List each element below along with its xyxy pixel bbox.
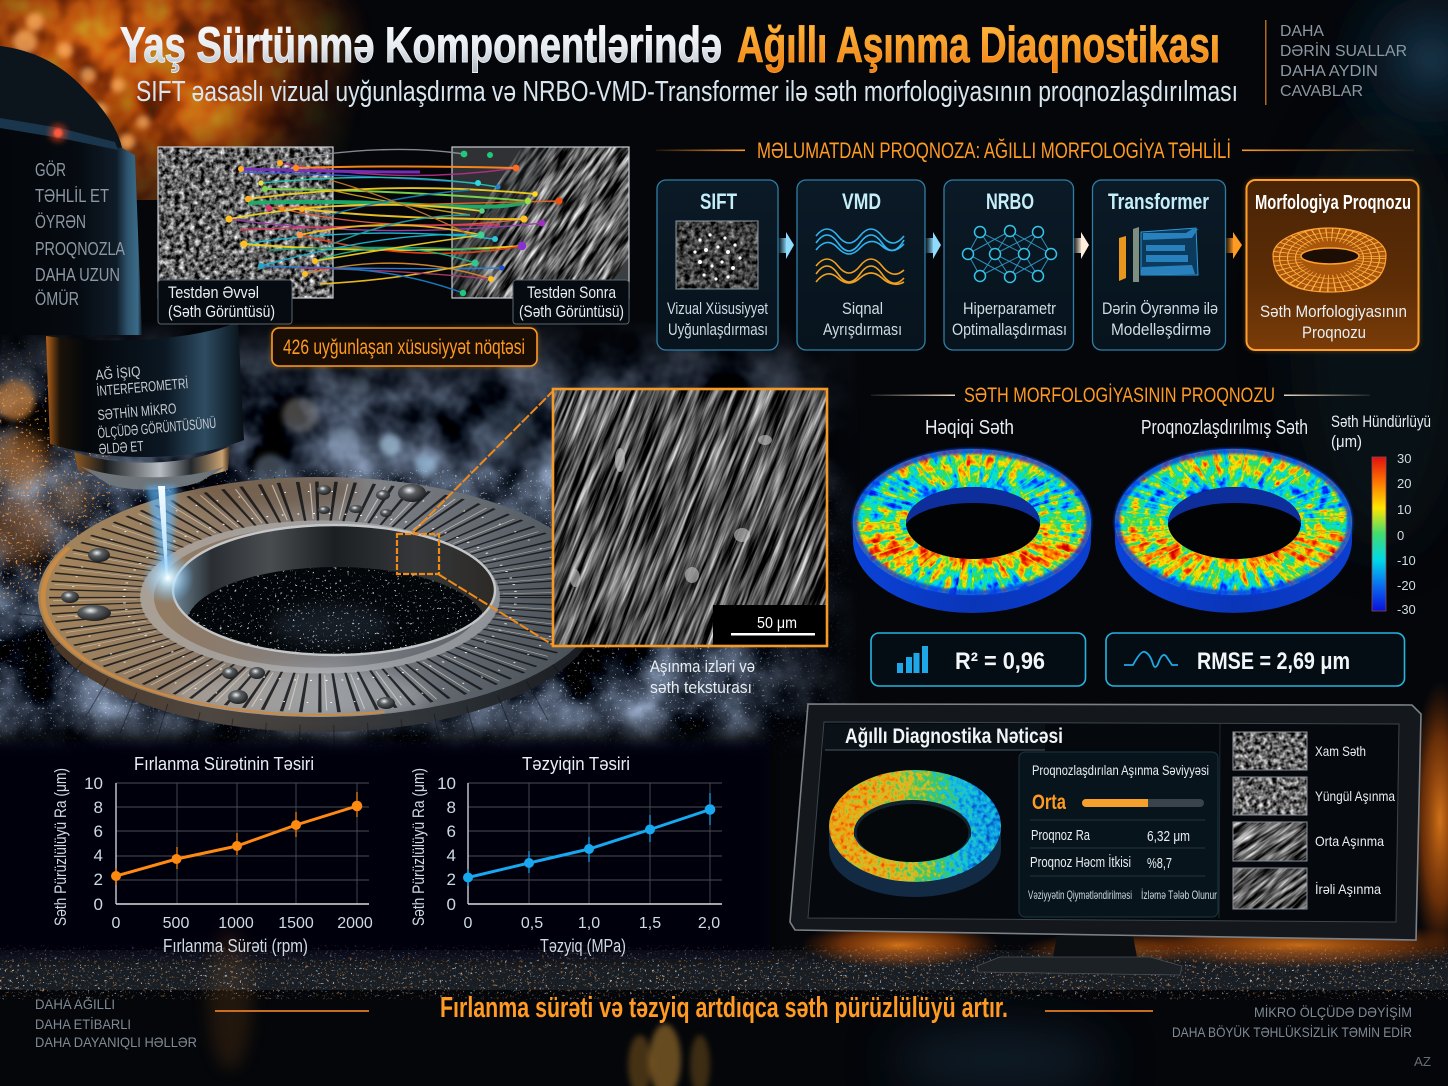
icon: blue signal waves	[816, 229, 904, 254]
panel: pressure chart: 10	[437, 774, 456, 793]
monitor screen	[808, 722, 1399, 922]
image: before test surface	[158, 147, 333, 298]
panel: pressure chart: Təzyiq (MPa)	[540, 936, 626, 956]
panel: prediction result: Vəziyyətin Qiymətləndirilməsi	[1028, 888, 1132, 902]
icon: neural network	[962, 226, 1056, 282]
legend: surface height colour bar: -10	[1397, 553, 1416, 568]
title: Ağıllı Aşınma Diaqnostikası	[737, 17, 1220, 73]
bottom surface strip	[0, 680, 1448, 1086]
label: after test: Testdən Sonra	[527, 283, 616, 302]
legend: surface height colour bar: -30	[1397, 602, 1416, 617]
panel: pressure chart: 6	[447, 822, 456, 841]
scale bar	[731, 615, 815, 636]
text: lens label: ÖLÇÜDƏ GÖRÜNTÜSÜNÜ	[97, 414, 217, 442]
header side note: DƏRİN SUALLAR	[1280, 41, 1407, 60]
wear stage: raw surface	[1233, 732, 1366, 770]
panel: NRBO step: Optimallaşdırması	[952, 321, 1067, 339]
legend: surface height colour bar: 20	[1397, 476, 1411, 491]
legend: surface height colour bar: (μm)	[1331, 433, 1362, 451]
text: left slogan: TƏHLİL ET	[35, 186, 109, 206]
wear stage: advanced wear	[1232, 868, 1382, 910]
panel: rotation speed chart: 0	[112, 915, 121, 932]
text: left slogan: GÖR	[35, 160, 66, 180]
chart grid	[116, 783, 369, 904]
panel: morphology prediction step	[1246, 180, 1418, 350]
blue data series	[464, 793, 715, 886]
text: bottom left slogan	[35, 996, 197, 1050]
panel: Transformer step: Transformer	[1108, 189, 1209, 214]
panel: rotation speed chart: 8	[94, 798, 103, 817]
feature points	[225, 151, 563, 296]
metric: RMSE: RMSE = 2,69 μm	[1197, 648, 1350, 675]
text: inset caption	[650, 657, 755, 697]
heading: result	[822, 724, 1220, 918]
panel: pressure chart: 4	[447, 846, 456, 865]
text: lens label: ƏLDƏ ET	[98, 439, 144, 458]
panel: rotation speed chart: 500	[163, 915, 189, 932]
text: bottom right slogan: DAHA BÖYÜK TƏHLÜKSİZLİK TƏMİN EDİR	[1172, 1023, 1412, 1040]
panel: rotation speed chart: 1500	[278, 915, 314, 932]
text: inset caption: Aşınma izləri və	[650, 657, 755, 676]
text: left slogan: DAHA UZUN	[35, 265, 120, 285]
panel: prediction result: Orta	[1032, 791, 1066, 814]
panel: pressure chart: 1,0	[578, 915, 600, 932]
header side note: CAVABLAR	[1280, 83, 1363, 100]
panel: NRBO step: Hiperparametr	[963, 300, 1056, 318]
text: lens label	[95, 362, 217, 458]
matching lines	[229, 149, 559, 293]
light beam	[142, 486, 194, 604]
panel: pressure chart: 8	[447, 798, 456, 817]
panel: pressure chart: 0	[464, 915, 473, 932]
icon: wave	[1124, 652, 1178, 667]
panel: Transformer step	[1092, 180, 1226, 350]
connector lines to inset	[412, 391, 553, 645]
panel: pressure chart	[409, 754, 722, 956]
wear stage: light wear	[1233, 777, 1395, 815]
panel: rotation speed chart: 0	[94, 895, 103, 914]
panel: metal friction disc	[38, 470, 602, 747]
label: before test	[158, 280, 292, 324]
panel: prediction result	[1019, 752, 1218, 917]
text: left slogan: ÖYRƏN	[35, 212, 86, 232]
ring side wall	[38, 497, 602, 747]
wear stage: advanced wear: İrəli Aşınma	[1315, 880, 1381, 897]
orange data series	[112, 792, 362, 885]
indicator light	[49, 124, 67, 142]
wear stage: light wear: Yüngül Aşınma	[1315, 788, 1395, 804]
heading: result: Ağıllı Diagnostika Nəticəsi	[845, 725, 1063, 748]
metric: R squared	[871, 633, 1086, 686]
icon: transformer blocks	[1119, 227, 1198, 282]
heading: morphology prediction: SƏTH MORFOLOGİYASININ PROQNOZU	[964, 384, 1275, 407]
wear stage: medium wear	[1232, 822, 1384, 862]
header side note	[1265, 20, 1407, 105]
panel: SEM inset	[552, 388, 828, 648]
text: bottom left slogan: DAHA DAYANIQLI HƏLLƏR	[35, 1034, 197, 1050]
panel: SIFT step: Uyğunlaşdırması	[668, 321, 768, 339]
arrow: VMD to NRBO	[925, 232, 941, 259]
ring top face	[38, 470, 602, 721]
language tag: AZ	[1414, 1054, 1431, 1069]
panel: NRBO step	[944, 180, 1074, 350]
text: bottom left slogan: DAHA ETİBARLI	[35, 1015, 131, 1032]
panel: rotation speed chart: 6	[94, 822, 103, 841]
icon: wireframe torus	[1272, 223, 1388, 293]
panel: morphology prediction step: Proqnozu	[1302, 323, 1366, 342]
callout: matched points	[272, 328, 537, 366]
text: bottom left slogan: DAHA AĞILLI	[35, 996, 115, 1012]
panel: rotation speed chart: 2000	[337, 915, 373, 932]
wear level bar	[1082, 799, 1204, 807]
ring inner hole	[172, 524, 496, 656]
scale bar: 50 μm	[757, 615, 797, 632]
panel: VMD step	[797, 180, 925, 350]
label: before test: Testdən Əvvəl	[168, 283, 259, 302]
panel: diagnostics monitor	[790, 704, 1421, 975]
panel: pressure chart: 1,5	[639, 915, 661, 932]
panel: prediction result: 6,32 μm	[1147, 829, 1190, 845]
panel: Transformer step: Modelləşdirmə	[1111, 321, 1211, 339]
legend: surface height colour bar: 10	[1397, 502, 1411, 517]
panel: SIFT feature matching	[157, 146, 630, 370]
lens lower cylinder	[46, 322, 244, 457]
panel: SIFT step: Vizual Xüsusiyyət	[667, 300, 768, 318]
background scene	[0, 0, 1448, 754]
panel: prediction result: Proqnozlaşdırılan Aşınma Səviyyəsi	[1032, 762, 1209, 778]
arrow: Transformer to prediction	[1225, 232, 1242, 259]
panel: prediction result: İzləmə Tələb Olunur	[1141, 888, 1217, 902]
panel: rotation speed chart: 2	[94, 870, 103, 889]
text: lens label: İNTERFEROMETRİ	[96, 374, 189, 400]
panel: rotation speed chart: 10	[84, 774, 103, 793]
header side note: DAHA	[1280, 23, 1324, 40]
legend: surface height colour bar: 30	[1397, 451, 1411, 466]
label: true surface: Həqiqi Səth	[925, 417, 1014, 439]
panel: morphology prediction step: Səth Morfologiyasının	[1260, 302, 1407, 321]
icon: keypoint image	[676, 221, 758, 289]
panel: NRBO step: NRBO	[986, 189, 1034, 214]
icon: orange signal waves	[816, 259, 904, 284]
panel: VMD step: Ayrışdırması	[823, 321, 902, 339]
panel: Transformer step: Dərin Öyrənmə ilə	[1102, 300, 1218, 318]
icon: bars	[897, 646, 928, 673]
label: after test	[513, 280, 629, 324]
panel: pressure chart: 0	[447, 895, 456, 914]
panel: prediction result: Proqnoz Həcm İtkisi	[1030, 853, 1131, 871]
panel: microscope lens	[0, 46, 244, 490]
panel: pressure chart: Səth Pürüzlülüyü Ra (μm)	[409, 768, 428, 926]
monitor stand	[977, 936, 1182, 975]
chart: true surface 3D ring	[850, 447, 1094, 613]
wear stage: raw surface: Xam Səth	[1315, 743, 1366, 759]
callout: matched points: 426 uyğunlaşan xüsusiyyət nöqtəsi	[283, 336, 525, 359]
image: after test surface	[452, 148, 628, 298]
chart: predicted surface 3D ring	[1112, 447, 1356, 613]
panel: SIFT step: SIFT	[700, 189, 737, 214]
panel: prediction result: Proqnoz Ra	[1031, 828, 1091, 844]
chart grid	[468, 783, 722, 904]
panel: prediction result: %8,7	[1147, 856, 1172, 872]
panel: rotation speed chart: Fırlanma Sürəti (rpm)	[163, 936, 308, 956]
panel: pressure chart: Təzyiqin Təsiri	[522, 754, 630, 774]
legend: surface height colour bar	[1331, 413, 1431, 617]
arrow: NRBO to Transformer	[1073, 232, 1089, 259]
text: inset caption: səth teksturası	[650, 678, 752, 697]
metric: R squared: R² = 0,96	[955, 648, 1045, 675]
legend: surface height colour bar: 0	[1397, 528, 1404, 543]
label: before test: (Səth Görüntüsü)	[168, 302, 275, 321]
panel: VMD step: VMD	[842, 189, 881, 214]
panel: rotation speed chart: Səth Pürüzlülüyü Ra (μm)	[51, 768, 70, 926]
panel: VMD step: Siqnal	[842, 300, 883, 318]
header side note: DAHA AYDIN	[1280, 63, 1378, 80]
panel: pressure chart: 0,5	[521, 915, 543, 932]
text: lens label: SƏTHİN MİKRO	[97, 399, 177, 424]
panel: rotation speed chart: 4	[94, 846, 103, 865]
panel: rotation speed chart: Fırlanma Sürətinin Təsiri	[134, 754, 314, 774]
water droplets	[61, 484, 426, 709]
title: Yaş Sürtünmə Komponentlərində	[120, 17, 722, 73]
text: bottom right slogan: MİKRO ÖLÇÜDƏ DƏYİŞİM	[1254, 1003, 1412, 1020]
metric: RMSE	[1106, 633, 1404, 686]
panel: pressure chart: 2	[447, 870, 456, 889]
label: predicted surface: Proqnozlaşdırılmış Səth	[1141, 417, 1308, 439]
text: bottom right slogan	[1172, 1003, 1412, 1040]
panel: pressure chart: 2,0	[698, 915, 720, 932]
heading: process pipeline: MƏLUMATDAN PROQNOZA: AĞILLI MORFOLOGİYA TƏHLİLİ	[757, 138, 1231, 163]
text: left slogan	[35, 160, 125, 309]
panel: rotation speed chart: 1000	[218, 915, 254, 932]
monitor bezel	[790, 704, 1421, 940]
chart: diagnostic ring	[829, 770, 1001, 897]
panel: SIFT step	[657, 180, 778, 350]
legend: surface height colour bar: -20	[1397, 578, 1416, 593]
panel: rotation speed chart	[51, 754, 373, 956]
text: left slogan: ÖMÜR	[35, 289, 79, 309]
text: lens label: AĞ İŞIQ	[95, 362, 141, 384]
conclusion banner: Fırlanma sürəti və təzyiq artdıqca səth pürüzlülüyü artır.	[440, 992, 1008, 1024]
dark band behind charts	[0, 742, 770, 960]
text: left slogan: PROQNOZLA	[35, 239, 125, 259]
arrow: SIFT to VMD	[778, 232, 794, 259]
wear stage: medium wear: Orta Aşınma	[1315, 833, 1384, 849]
label: after test: (Səth Görüntüsü)	[519, 302, 624, 321]
inspected region marker	[397, 534, 439, 574]
